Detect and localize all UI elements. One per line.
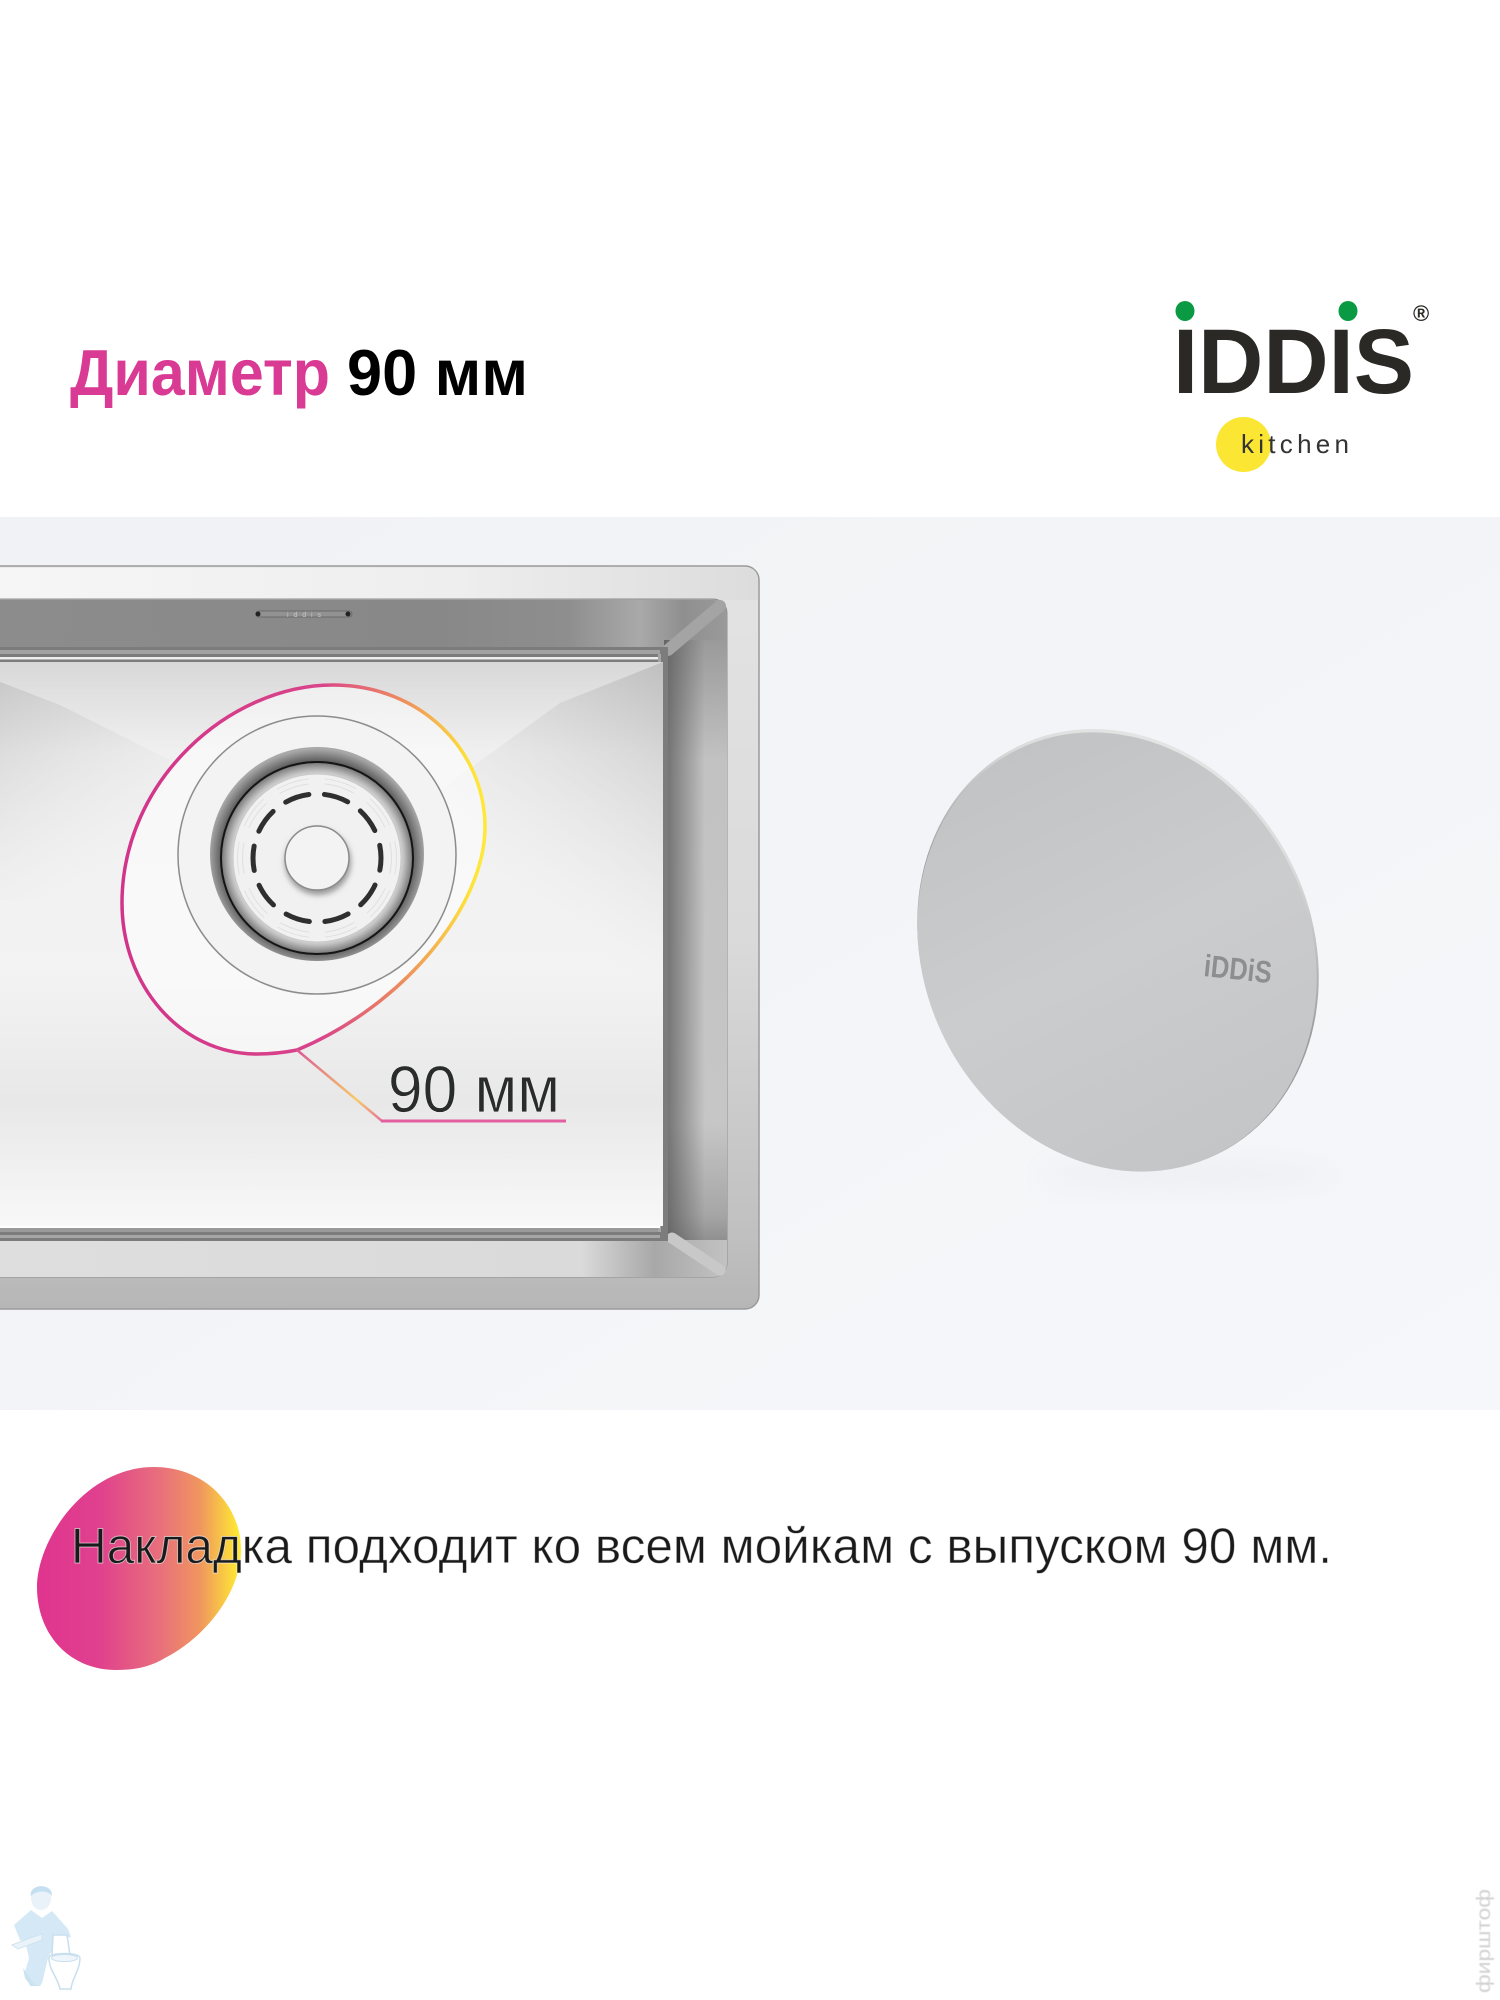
vertical watermark text: фирштоф <box>1474 1889 1495 1993</box>
disc logo: iDDiS <box>1202 948 1274 990</box>
title <box>70 336 528 409</box>
drain <box>178 716 456 994</box>
logo: IDDIS kitchen: kitchen <box>1241 429 1349 459</box>
faint outer slots <box>240 781 394 935</box>
logo: IDDIS kitchen: ® <box>1413 301 1429 326</box>
sink rim <box>0 566 759 1309</box>
dimension label: 90 мм <box>388 1052 560 1126</box>
logo: IDDIS kitchen: IDDIS <box>1173 311 1414 413</box>
corner seams <box>668 606 720 650</box>
drain slots <box>253 794 381 922</box>
disc face <box>845 665 1389 1239</box>
basin walls <box>0 599 727 1277</box>
description text: Накладка подходит ко всем мойкам с выпуском 90 мм. <box>71 1518 1332 1574</box>
drain dark ring <box>210 747 424 961</box>
icon: plumber with toilet watermark <box>12 1886 80 1989</box>
disc edge <box>844 661 1392 1239</box>
basin floor step <box>0 647 668 1241</box>
disc shadow <box>1040 1165 1340 1185</box>
drain cap <box>285 826 351 895</box>
panel: product photo background <box>0 517 1500 1410</box>
leader line <box>297 1050 566 1121</box>
drain flange <box>178 716 456 994</box>
title: 90 мм <box>347 336 528 409</box>
highlighted area: gradient outline <box>122 685 485 1054</box>
basin floor <box>0 662 663 1226</box>
overflow slot <box>256 611 352 619</box>
disc cover product <box>844 661 1392 1239</box>
title: Диаметр <box>70 336 330 409</box>
logo: IDDIS kitchen <box>1173 301 1429 472</box>
overflow slot: iddis <box>287 612 322 619</box>
accent blob <box>37 1467 241 1670</box>
sink <box>0 566 759 1309</box>
